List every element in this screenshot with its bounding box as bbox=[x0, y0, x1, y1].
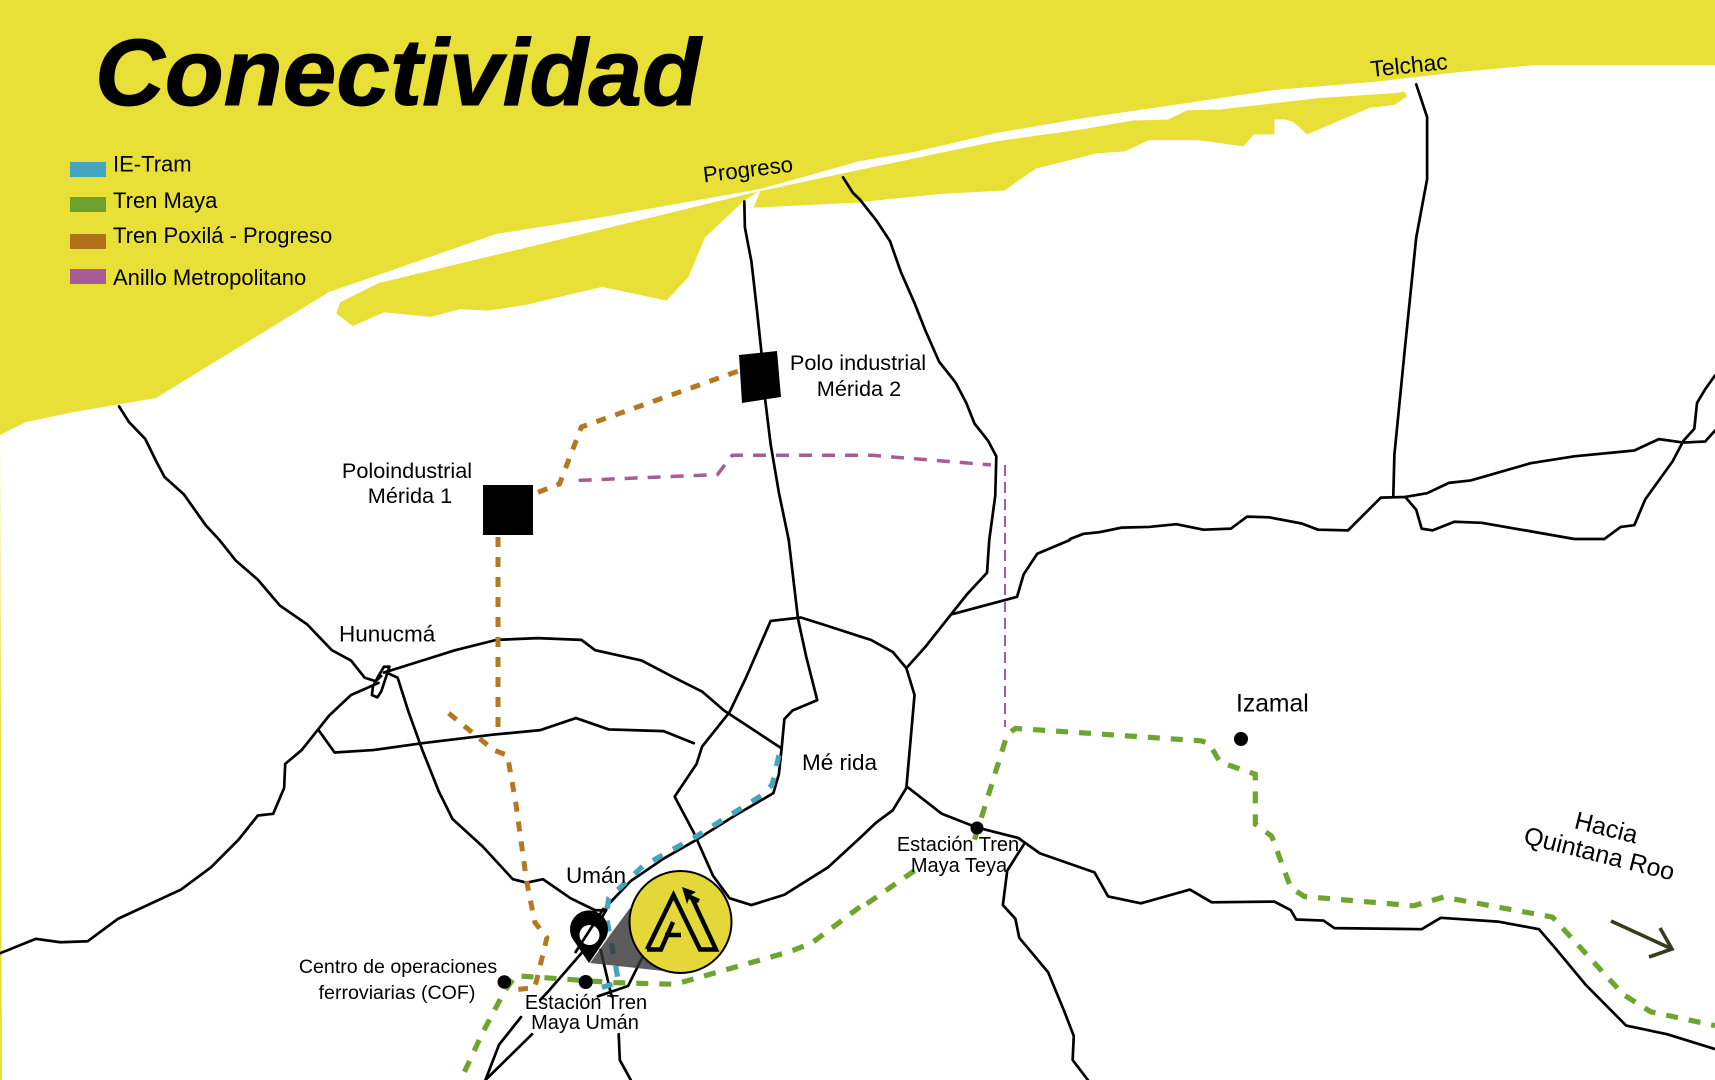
label: Umán: Umán bbox=[566, 863, 626, 888]
label: Estación Tren Maya Teya: Maya Teya bbox=[911, 855, 1008, 877]
legend item: Anillo Metropolitano: Anillo Metropolitano bbox=[113, 265, 306, 290]
Polo industrial Mérida 1 block bbox=[483, 485, 533, 535]
label: Mérida: Mé rida bbox=[802, 750, 878, 775]
route: Anillo Metropolitano bbox=[579, 455, 1005, 727]
legend item: Tren Poxilá - Progreso: Tren Poxilá - Progreso bbox=[113, 223, 332, 248]
route: Tren Poxilá - Progreso bbox=[449, 371, 738, 989]
label: Estación Tren Maya Umán: Maya Umán bbox=[531, 1012, 639, 1034]
label: Centro de operaciones ferroviarias: ferroviarias (COF) bbox=[319, 982, 475, 1004]
label: Hacia Quintana Roo: Hacia bbox=[1572, 807, 1641, 849]
label: Polo industrial Mérida 2: Mérida 2 bbox=[817, 376, 901, 401]
callout wedge bbox=[590, 908, 673, 972]
legend item: IE-Tram: IE-Tram bbox=[113, 152, 192, 176]
legend item: Tren Maya: Tren Maya bbox=[113, 188, 218, 213]
label: Poloindustrial Mérida 1: Mérida 1 bbox=[368, 483, 452, 508]
label: Polo industrial Mérida 2: Polo industrial bbox=[790, 350, 926, 375]
label: Estación Tren Maya Umán: Estación Tren bbox=[525, 992, 647, 1014]
legend item: IE-Tram bbox=[70, 152, 192, 177]
legend bbox=[70, 152, 332, 290]
route: IE-Tram bbox=[595, 755, 779, 989]
label: Hacia Quintana Roo: Quintana Roo bbox=[1521, 822, 1677, 886]
label: Poloindustrial Mérida 1: Poloindustrial bbox=[342, 458, 472, 483]
route: Tren Maya bbox=[461, 728, 1715, 1080]
dot: Izamal bbox=[1234, 732, 1248, 746]
station dots bbox=[498, 732, 1248, 989]
dot: Estación Maya Teya bbox=[970, 822, 984, 834]
label: Izamal: Izamal bbox=[1236, 690, 1309, 718]
location pin bbox=[570, 908, 608, 963]
logo badge bbox=[630, 871, 732, 973]
Polo industrial Mérida 2 block bbox=[739, 351, 781, 403]
label: Telchac: Telchac bbox=[1369, 48, 1449, 82]
arrow: toward Quintana Roo bbox=[1611, 921, 1672, 957]
land strip west of Progreso bbox=[336, 191, 758, 326]
label: Estación Tren Maya Teya: Estación Tren bbox=[897, 834, 1019, 856]
title: Conectividad bbox=[95, 20, 703, 126]
dot: Estación Maya Umán bbox=[579, 975, 593, 989]
land strip east of Progreso bbox=[754, 91, 1407, 208]
label: Hunucmá: Hunucmá bbox=[339, 622, 436, 646]
label: Centro de operaciones ferroviarias: Centro de operaciones bbox=[299, 956, 497, 978]
dot: Centro de operaciones bbox=[498, 975, 511, 989]
label: Progreso: Progreso bbox=[702, 152, 794, 187]
